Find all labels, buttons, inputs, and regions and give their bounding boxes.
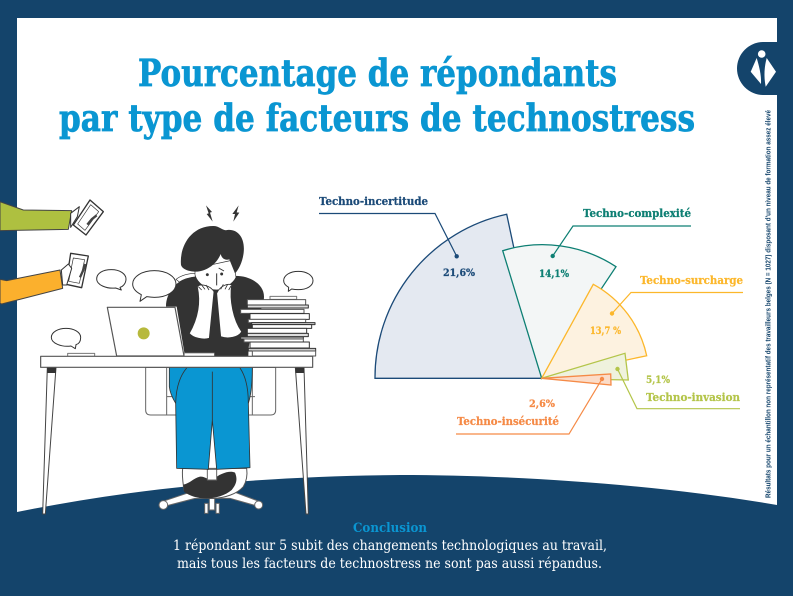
title	[59, 51, 695, 140]
chair	[146, 367, 276, 513]
desk	[41, 353, 313, 514]
callout: techno-surcharge: 13,7 %	[590, 326, 621, 337]
laptop	[107, 307, 184, 356]
illustration: stressed worker at desk	[0, 200, 316, 514]
callout: techno-incertitude: Techno-incertitude	[319, 194, 428, 208]
chart: radial wedges	[375, 214, 647, 385]
icon: stress bolts	[206, 205, 239, 222]
person face	[195, 260, 236, 290]
wedge: techno-insécurité	[542, 374, 611, 385]
book stack	[241, 296, 316, 356]
wedge: techno-surcharge	[542, 284, 647, 378]
callout: techno-incertitude	[319, 194, 475, 279]
person shins and feet	[182, 468, 247, 498]
callout: techno-complexité: Techno-complexité	[583, 206, 691, 220]
callout: techno-surcharge	[590, 273, 743, 337]
callout: techno-incertitude: 21,6%	[443, 268, 475, 279]
callout: techno-insécurité	[456, 377, 604, 434]
callout: techno-complexité	[539, 206, 691, 280]
person legs	[169, 367, 252, 469]
callout: techno-surcharge: Techno-surcharge	[640, 273, 743, 287]
source note: Résultats pour un échantillon non représentatif des travailleurs belges (N = 1027) disposant d'un niveau de formation assez élevé	[766, 110, 772, 498]
callout: techno-insécurité: 2,6%	[529, 399, 555, 410]
person arms and hands	[189, 284, 242, 339]
wedge: techno-invasion	[542, 353, 628, 380]
callout: techno-invasion	[615, 367, 741, 409]
conclusion: 1 répondant sur 5 subit des changements technologiques au travail,	[173, 538, 607, 554]
arm: green sleeve with phone	[0, 200, 103, 235]
logo	[737, 42, 793, 95]
person hair	[181, 226, 244, 273]
arm: orange sleeve with phone	[0, 253, 88, 304]
callout: techno-invasion: 5,1%	[646, 375, 670, 386]
conclusion: Conclusion	[353, 521, 427, 536]
title: Pourcentage de répondants	[138, 51, 617, 95]
callout: techno-insécurité: Techno-insécurité	[457, 414, 559, 428]
person torso	[166, 274, 264, 357]
white content panel	[17, 18, 777, 512]
conclusion: mais tous les facteurs de technostress ne sont pas aussi répandus.	[177, 556, 602, 572]
speech bubbles	[51, 270, 313, 349]
callout: techno-complexité: 14,1%	[539, 269, 569, 280]
callout: techno-invasion: Techno-invasion	[646, 390, 741, 404]
conclusion	[173, 521, 607, 572]
wedge: techno-complexité	[503, 245, 616, 378]
person eyes and nose	[206, 268, 224, 285]
wedge: techno-incertitude	[375, 214, 542, 378]
